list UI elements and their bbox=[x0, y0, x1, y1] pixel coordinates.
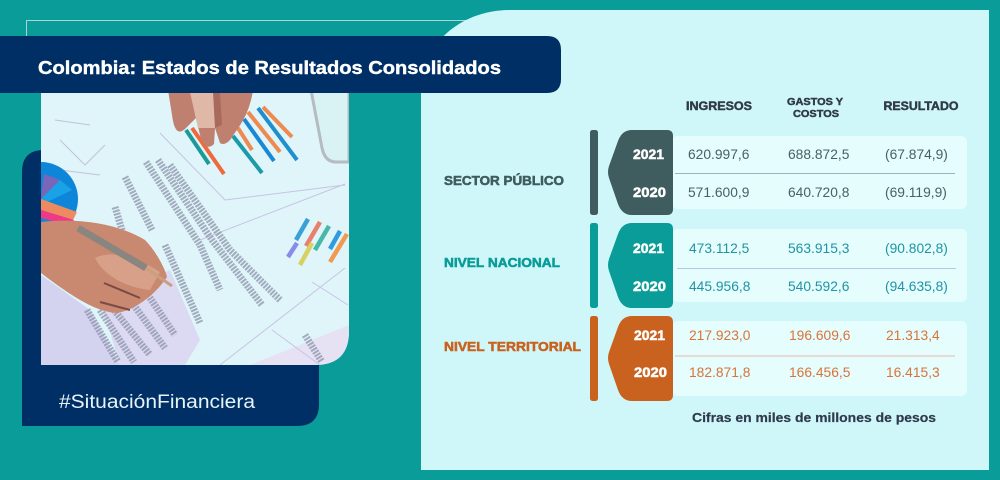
column headers: RESULTADO bbox=[884, 99, 958, 113]
section: nivel territorial: 166.456,5 bbox=[789, 365, 851, 380]
column headers bbox=[686, 96, 958, 120]
panel: navy photo backing with hashtag bbox=[22, 150, 319, 426]
section: sector público: 640.720,8 bbox=[788, 185, 850, 200]
section: nivel nacional: 540.592,6 bbox=[788, 279, 850, 294]
section: nivel nacional: 2020 bbox=[633, 279, 666, 294]
hand on bar chart bbox=[168, 90, 253, 147]
section: nivel nacional: (90.802,8) bbox=[885, 241, 948, 256]
section: nivel territorial bbox=[444, 316, 967, 401]
section: sector público bbox=[444, 130, 967, 215]
hand holding pen bbox=[41, 221, 172, 313]
number columns in photo bbox=[87, 160, 322, 362]
title bar bbox=[0, 36, 561, 93]
bar chart in photo bbox=[186, 107, 297, 174]
section: nivel territorial: 2020 bbox=[634, 365, 667, 380]
section: nivel nacional: 563.915,3 bbox=[788, 241, 850, 256]
section: sector público: 571.600,9 bbox=[688, 185, 750, 200]
photo: hands reviewing financial charts bbox=[41, 93, 349, 365]
section: nivel nacional: 473.112,5 bbox=[689, 241, 750, 256]
label: nivel nacional: NIVEL NACIONAL bbox=[444, 255, 560, 270]
section: nivel territorial: 21.313,4 bbox=[886, 328, 940, 343]
section: sector público: 620.997,6 bbox=[688, 147, 750, 162]
column headers: COSTOS bbox=[793, 108, 839, 120]
column headers: INGRESOS bbox=[686, 99, 752, 113]
section: nivel territorial: 196.609,6 bbox=[789, 328, 851, 343]
section: nivel territorial: 217.923,0 bbox=[689, 328, 751, 343]
section: sector público: 2020 bbox=[633, 185, 666, 200]
section: sector público: 688.872,5 bbox=[788, 147, 850, 162]
section: nivel territorial: 2021 bbox=[634, 328, 665, 343]
section: sector público: (69.119,9) bbox=[885, 185, 947, 200]
hashtag: #SituaciónFinanciera bbox=[59, 392, 255, 413]
section: nivel territorial: 16.415,3 bbox=[886, 365, 940, 380]
panel: results table background bbox=[421, 10, 989, 470]
label: nivel territorial: NIVEL TERRITORIAL bbox=[444, 339, 581, 354]
label: sector público: SECTOR PÚBLICO bbox=[444, 173, 564, 188]
section: nivel nacional: 2021 bbox=[633, 241, 664, 256]
section: sector público: 2021 bbox=[633, 147, 664, 162]
section: sector público: (67.874,9) bbox=[885, 147, 948, 162]
section: nivel nacional: 445.956,8 bbox=[689, 279, 751, 294]
footnote: units: Cifras en miles de millones de pesos bbox=[692, 411, 936, 425]
title: Colombia: Estados de Resultados Consolidados bbox=[38, 57, 501, 78]
section: nivel nacional bbox=[444, 223, 967, 308]
column headers: GASTOS Y bbox=[787, 96, 843, 108]
section: nivel territorial: 182.871,8 bbox=[689, 365, 751, 380]
pie chart in photo bbox=[41, 162, 78, 222]
small bar chart in photo bbox=[288, 219, 347, 265]
section: nivel nacional: (94.635,8) bbox=[885, 279, 948, 294]
